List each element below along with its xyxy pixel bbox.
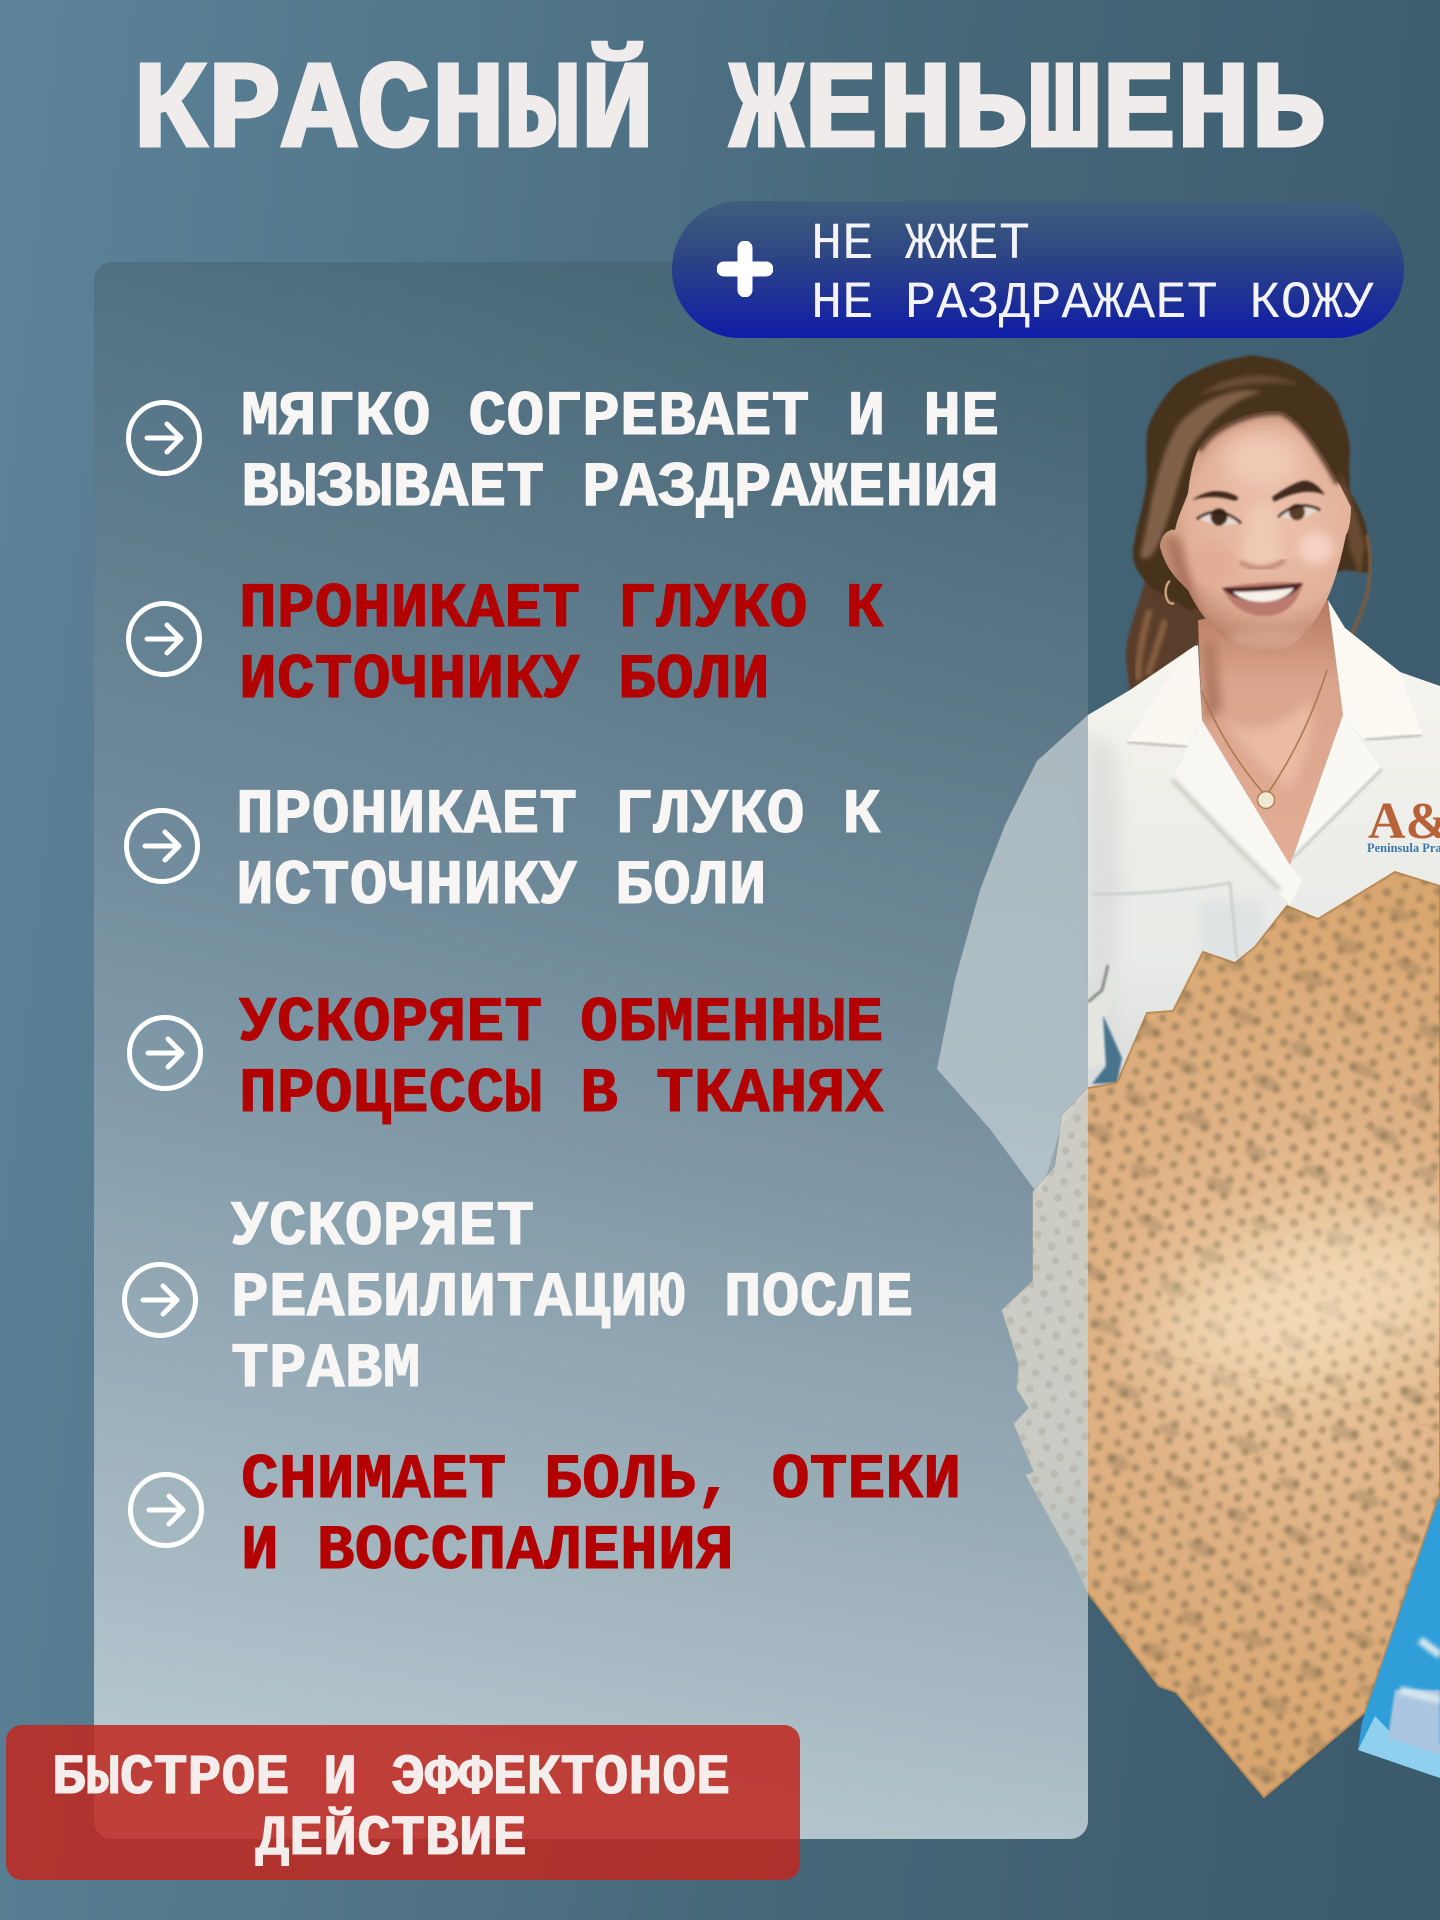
benefit 4 bbox=[127, 988, 884, 1130]
patch edge through panel bbox=[1002, 1088, 1088, 1593]
hair back bbox=[1133, 355, 1370, 610]
badge text: НЕ ЖЖЕТ НЕ РАЗДРАЖАЕТ КОЖУ bbox=[811, 215, 1374, 333]
sleeve highlight bbox=[937, 715, 1088, 1197]
benefit 3 bbox=[124, 780, 882, 922]
title: КРАСНЫЙ ЖЕНЬШЕНЬ bbox=[133, 44, 1325, 184]
callout: fast action bbox=[6, 1725, 800, 1880]
face shading bbox=[1165, 411, 1339, 652]
text: УСКОРЯЕТ ОБМЕННЫЕ ПРОЦЕССЫ В ТКАНЯХ bbox=[239, 988, 883, 1130]
icon: arrow bbox=[122, 1262, 198, 1338]
earring bbox=[1166, 581, 1174, 604]
lab coat bbox=[937, 628, 1440, 1197]
panel: benefits background bbox=[94, 262, 1088, 1839]
ponytail bbox=[1126, 570, 1210, 692]
necklace bbox=[1201, 670, 1327, 796]
coat shading bbox=[1086, 730, 1120, 1060]
icon: arrow bbox=[124, 808, 200, 884]
neck bbox=[1198, 600, 1343, 865]
hand bbox=[1088, 961, 1118, 1070]
text: МЯГКО СОГРЕВАЕТ И НЕ ВЫЗЫВАЕТ РАЗДРАЖЕНИЯ bbox=[241, 382, 999, 524]
icon: arrow bbox=[126, 400, 202, 476]
patch sheet bbox=[1002, 872, 1440, 1797]
text: УСКОРЯЕТ РЕАБИЛИТАЦИЮ ПОСЛЕ ТРАВМ bbox=[231, 1192, 913, 1405]
text: ПРОНИКАЕТ ГЛУКО К ИСТОЧНИКУ БОЛИ bbox=[239, 574, 883, 716]
benefit 6 bbox=[128, 1445, 961, 1587]
pendant bbox=[1258, 792, 1274, 808]
icon: plus bbox=[717, 241, 773, 297]
lapel left bbox=[1172, 722, 1302, 905]
stray strand bbox=[1352, 535, 1370, 643]
patch texture bbox=[1088, 872, 1440, 1795]
gap bbox=[1092, 1015, 1122, 1084]
brows bbox=[1192, 491, 1238, 501]
woman bbox=[937, 355, 1440, 1197]
icon: arrow bbox=[128, 1472, 204, 1548]
nose bbox=[1240, 505, 1285, 569]
pocket seam bbox=[1093, 883, 1237, 958]
face bbox=[1160, 411, 1351, 653]
icon: arrow bbox=[127, 1015, 203, 1091]
text: ПРОНИКАЕТ ГЛУКО К ИСТОЧНИКУ БОЛИ bbox=[236, 780, 880, 922]
mouth bbox=[1222, 582, 1303, 616]
collar right bbox=[1328, 600, 1422, 740]
benefit 2 bbox=[126, 574, 884, 716]
icon: arrow bbox=[126, 601, 202, 677]
collar left bbox=[1127, 645, 1202, 747]
badge: no burning bbox=[672, 201, 1404, 338]
photo: doctor holding herbal patch bbox=[937, 354, 1440, 1798]
benefit 5 bbox=[122, 1192, 913, 1405]
photo seen through panel: sleeve and patch edge bbox=[937, 715, 1088, 1592]
benefit 1 bbox=[126, 382, 999, 524]
callout text: БЫСТРОЕ И ЭФФЕКТОНОЕ ДЕЙСТВИЕ bbox=[52, 1746, 730, 1871]
lapel right bbox=[1293, 715, 1382, 858]
eyes bbox=[1197, 504, 1320, 526]
hair highlights bbox=[1140, 390, 1262, 559]
herbal patch bbox=[980, 860, 1440, 1810]
blue packet bbox=[1358, 1495, 1440, 1778]
text: СНИМАЕТ БОЛЬ, ОТЕКИ И ВОССПАЛЕНИЯ bbox=[241, 1445, 961, 1587]
